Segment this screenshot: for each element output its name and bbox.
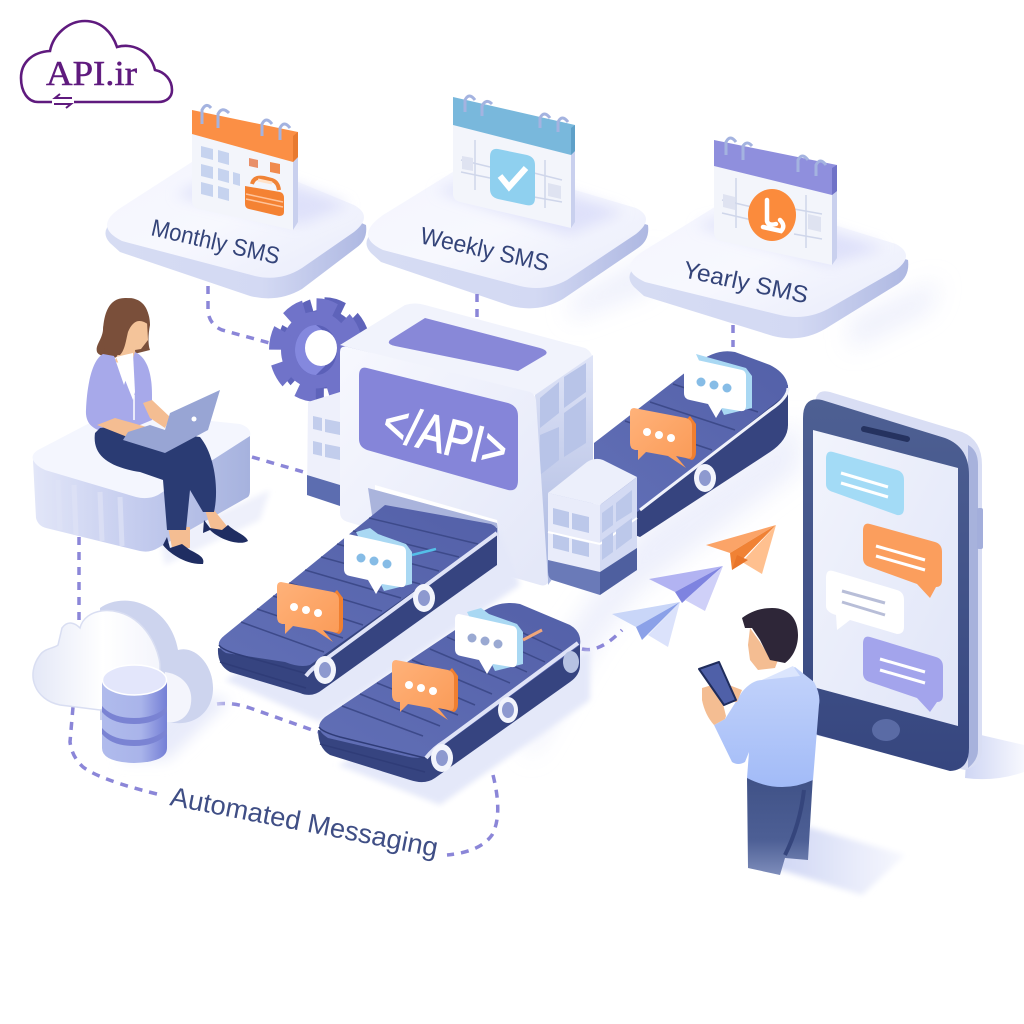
ankles <box>168 510 230 548</box>
label: Yearly SMS: Yearly SMS <box>681 256 811 309</box>
API machine <box>340 304 593 585</box>
label: Weekly SMS: Weekly SMS <box>418 222 551 277</box>
roller <box>431 744 453 772</box>
screen <box>813 430 958 726</box>
cloud with database <box>33 601 230 763</box>
shoe <box>203 520 248 543</box>
bubble: orange <box>277 582 343 642</box>
API screen <box>359 368 518 490</box>
shoe <box>163 537 203 564</box>
panel: Monthly SMS platform <box>105 105 366 298</box>
conveyor belt: upper right <box>594 351 788 537</box>
roller <box>413 584 435 612</box>
laptop <box>123 390 220 453</box>
calendar: monthly <box>192 105 298 230</box>
arms <box>97 400 170 442</box>
bubble: white <box>684 354 752 418</box>
message: orange <box>863 524 942 598</box>
paper plane: orange <box>706 525 776 574</box>
icon: gear <box>280 309 360 390</box>
right server tower <box>548 459 637 595</box>
hair front <box>103 298 149 355</box>
woman with laptop <box>86 298 248 564</box>
logo: API.ir cloud <box>21 21 172 108</box>
message: white <box>826 571 904 634</box>
hair back <box>97 298 150 357</box>
paper plane: purple <box>649 566 723 611</box>
bubble: orange <box>630 408 696 468</box>
bubble: white <box>455 608 523 674</box>
platform shadows <box>520 250 940 760</box>
label: Monthly SMS: Monthly SMS <box>149 215 282 270</box>
hair <box>742 608 798 663</box>
roller <box>694 464 716 492</box>
message: purple <box>863 637 943 712</box>
phone <box>803 391 1024 779</box>
connectors: dashed lines <box>70 286 733 855</box>
calendar: yearly <box>714 138 837 265</box>
icon: briefcase <box>245 178 284 216</box>
side button <box>977 508 983 549</box>
logo: API.ir cloud: API.ir <box>46 54 137 93</box>
top panel <box>389 318 547 371</box>
roller <box>498 697 518 723</box>
cloud back <box>100 601 213 723</box>
panel: Yearly SMS platform <box>629 138 908 338</box>
panel: Weekly SMS platform <box>366 96 648 308</box>
bench <box>33 411 270 565</box>
message: blue <box>826 452 904 515</box>
left server tower <box>307 392 340 506</box>
conveyor belt: lower left <box>218 505 520 722</box>
cardigan <box>86 352 152 432</box>
icon: orange clock <box>748 189 796 241</box>
cloud front <box>33 611 160 710</box>
face <box>114 319 148 365</box>
shirt <box>714 667 819 787</box>
icon: check badge <box>490 149 535 205</box>
conveyor belt: lower middle <box>318 603 590 805</box>
hands <box>702 685 742 725</box>
small phone <box>699 662 736 705</box>
roller <box>563 651 579 673</box>
head <box>748 628 778 670</box>
database <box>102 665 167 763</box>
paper plane: light <box>612 602 680 647</box>
trousers <box>95 425 216 530</box>
label: Automated Messaging: Automated Messaging <box>168 781 441 863</box>
man with phone <box>699 608 905 895</box>
API screen: </API> <box>377 393 513 480</box>
bubble: orange <box>392 660 458 720</box>
roller <box>314 656 336 684</box>
trousers <box>747 775 813 875</box>
calendar: weekly <box>453 96 575 228</box>
shirt <box>116 353 135 400</box>
bubble: white <box>344 528 412 594</box>
